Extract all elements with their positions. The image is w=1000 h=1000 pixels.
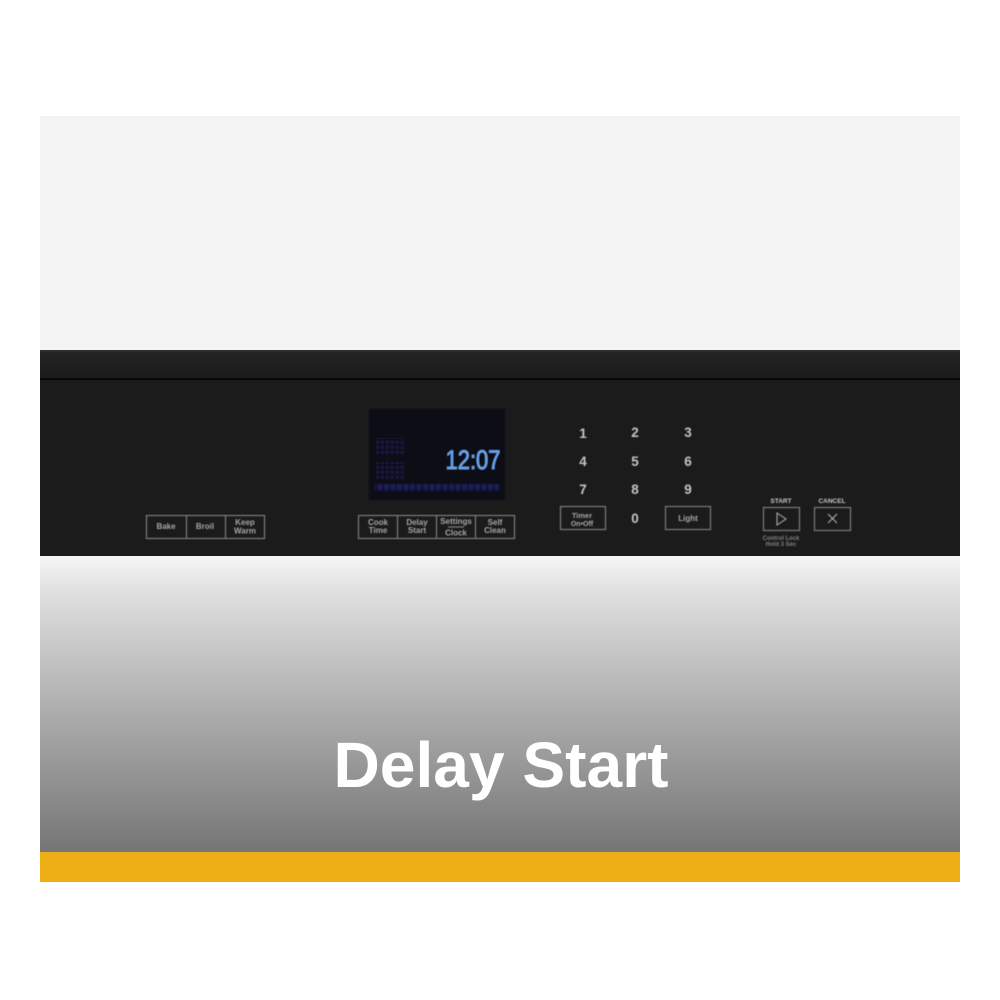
center button labels: Cook	[368, 518, 389, 527]
left button labels: Bake	[156, 522, 176, 531]
upper wall background	[40, 116, 960, 350]
left button group: Bake Broil Keep Warm	[146, 516, 264, 538]
left button labels: Keep	[235, 518, 255, 527]
center button labels: Clean	[484, 526, 506, 535]
timer button: On•Off	[571, 521, 594, 528]
center button labels: Start	[408, 526, 426, 535]
left button labels	[156, 518, 256, 536]
start button: START	[770, 498, 792, 505]
number keypad: 7	[579, 482, 587, 497]
oven control panel	[40, 350, 960, 556]
title: Delay Start	[334, 729, 668, 801]
light button	[666, 506, 710, 530]
number keypad: 4	[579, 454, 587, 469]
center button labels: Settings	[440, 517, 472, 526]
number keypad: 8	[631, 482, 639, 497]
number keypad: 0	[631, 511, 639, 526]
start button	[762, 498, 800, 548]
number keypad	[579, 425, 692, 526]
center button labels: Time	[369, 526, 388, 535]
timer button: Timer	[572, 511, 592, 520]
number keypad: 1	[579, 426, 587, 441]
timer button	[560, 506, 606, 530]
center button labels: Self	[488, 518, 503, 527]
yellow footer bar	[40, 852, 960, 882]
lower gradient panel	[40, 556, 960, 852]
clock readout: 12:07	[446, 445, 500, 475]
cancel button: CANCEL	[818, 498, 846, 505]
number keypad: 2	[631, 425, 639, 440]
left button labels: Broil	[196, 522, 214, 531]
number keypad: 9	[684, 482, 692, 497]
center button group: Cook Time, Delay Start, Settings Clock, Self Clean	[358, 516, 514, 538]
start button: Hold 3 Sec	[766, 542, 797, 548]
light button: Light	[678, 514, 698, 523]
center button labels: Clock	[445, 528, 467, 538]
cancel button	[814, 498, 850, 530]
start button: Control Lock	[762, 536, 800, 542]
number keypad: 3	[684, 425, 692, 440]
number keypad: 5	[631, 454, 639, 469]
left button labels: Warm	[234, 526, 256, 536]
center button labels	[368, 517, 506, 538]
center button labels: Delay	[406, 518, 428, 527]
display screen	[369, 409, 505, 500]
number keypad: 6	[684, 454, 692, 469]
